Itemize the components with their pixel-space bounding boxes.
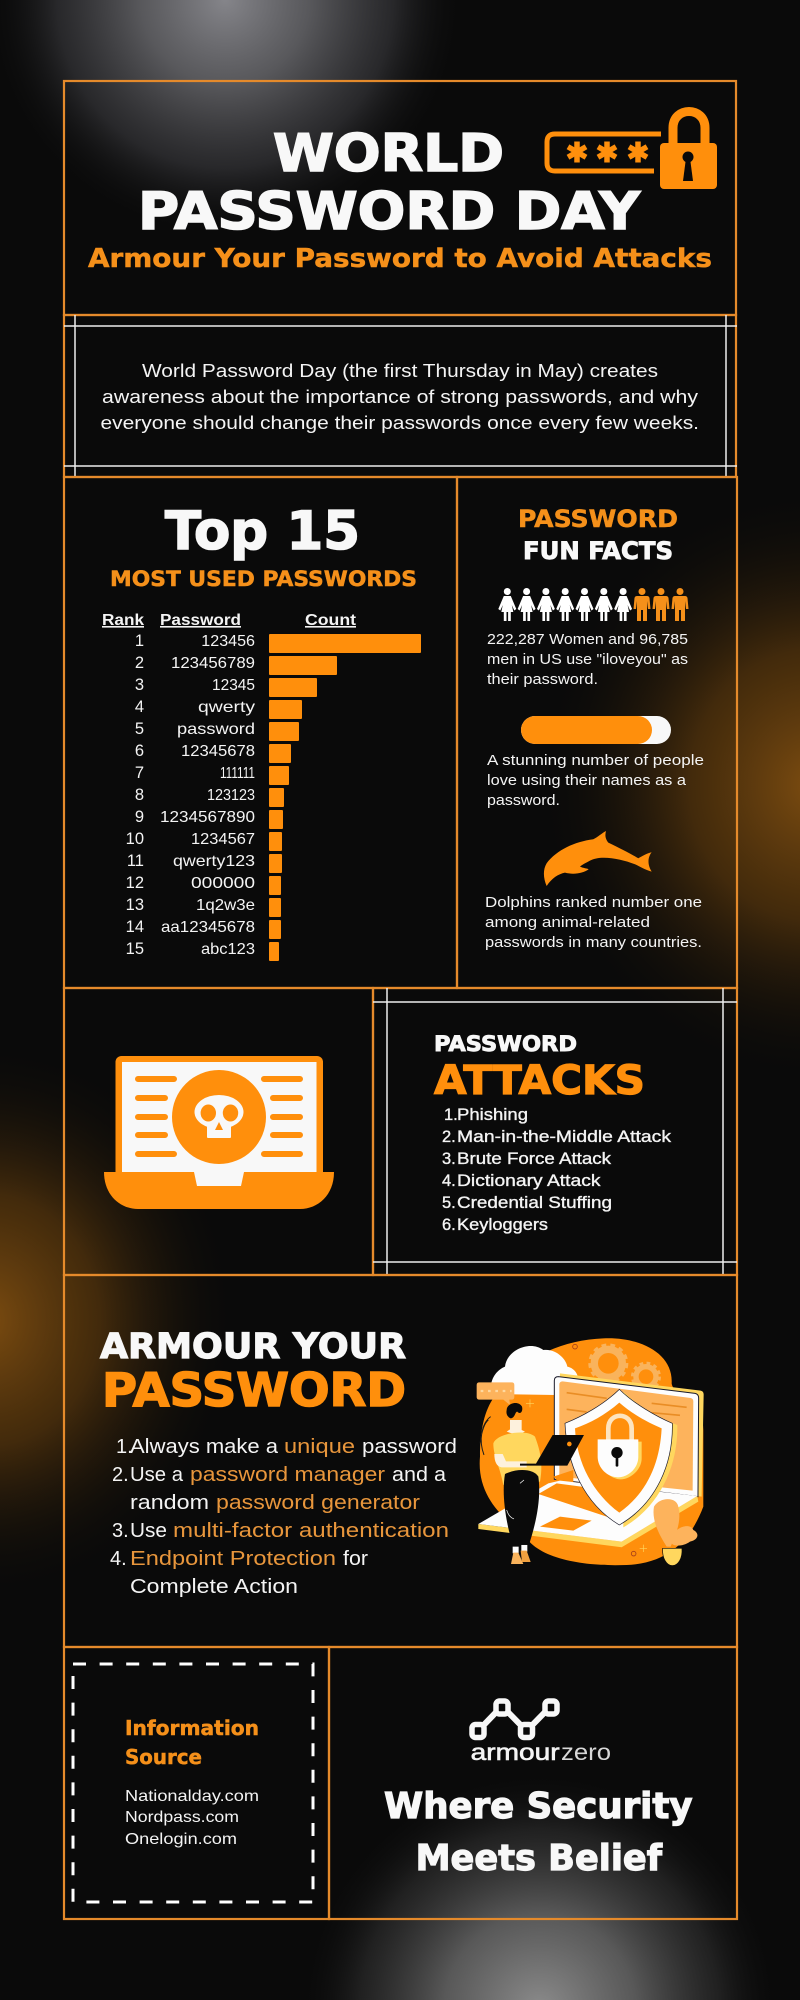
heading: password attacks [434,1032,645,1104]
tips list: unique [284,1436,355,1458]
rank column: 12 [126,874,144,892]
attacks list: 5. [442,1194,456,1212]
attacks list: Brute Force Attack [457,1150,612,1168]
dashed box [73,1664,313,1902]
heading: password attacks: PASSWORD [434,1032,577,1056]
rank column: 6 [135,742,144,760]
heading: information source: Information [125,1716,259,1740]
icon: dolphin [544,831,652,886]
tips list: 1. [116,1436,133,1458]
heading: fun facts: FUN FACTS [523,537,673,565]
table header [102,612,357,629]
icon: toggle progress bar [521,716,671,744]
fact 1 text: their password. [487,671,598,688]
rank column: 5 [135,720,144,738]
password column: 1234567890 [160,809,255,826]
rank column [126,632,144,958]
tips list: password [362,1436,457,1458]
rank column: 14 [126,918,144,936]
password column: 1q2w3e [196,897,255,914]
attacks list: 6. [442,1216,456,1234]
fact 2 text [487,752,704,809]
rank column: 11 [127,852,144,870]
password column: 12345 [212,677,255,694]
tips list: for [343,1548,368,1570]
attacks list: Man-in-the-Middle Attack [457,1128,672,1146]
tips list: password generator [216,1492,420,1514]
attacks list: Phishing [457,1106,528,1124]
rank column: 13 [126,896,144,914]
subheading: MOST USED PASSWORDS [110,567,417,591]
title [138,124,641,242]
tips list: Use [130,1520,167,1542]
fact 1 text: 222,287 Women and 96,785 [487,631,688,648]
rank column: 9 [135,808,144,826]
password column: 12345678 [181,743,255,760]
heading: armour your password [100,1327,406,1417]
fact 3 text: among animal-related [485,914,650,931]
heading: armour your password: ARMOUR YOUR [100,1327,406,1367]
logo: armourzero [471,1701,611,1765]
panel: top 15 most used passwords [64,477,457,988]
tips list: Endpoint Protection [130,1548,336,1570]
panel: laptop illustration [64,988,373,1275]
attacks list: 4. [442,1172,456,1190]
icon: password field and padlock [547,112,717,189]
panel: header [64,81,736,315]
password column: 000000 [191,875,255,892]
heading: password attacks: ATTACKS [434,1058,645,1104]
sources list [125,1788,259,1848]
heading: information source [125,1716,259,1769]
tips list: 4. [110,1548,127,1570]
table header: Rank [102,612,144,629]
panel: brand [329,1647,737,1919]
illustration: person with laptop and security shield [477,1338,704,1566]
logo: armourzero: armour [471,1739,560,1765]
intro text: World Password Day (the first Thursday in May) creates [142,360,658,381]
tips list: Always make a [130,1436,279,1458]
fact 3 text: passwords in many countries. [485,934,702,951]
tips list: 3. [112,1520,129,1542]
icon: people pictogram [498,588,688,621]
tips list: 2. [112,1464,129,1486]
password column: qwerty123 [173,853,255,870]
fact 3 text [485,894,702,951]
password column: 123456 [201,633,255,650]
sources list: Nationalday.com [125,1788,259,1805]
sources list: Nordpass.com [125,1809,239,1826]
logo: armourzero: zero [561,1739,611,1765]
password column: 123123 [207,787,255,804]
password column: password [177,721,255,738]
password column: 1234567 [191,831,255,848]
tips list: multi-factor authentication [173,1520,449,1542]
password column: 111111 [220,765,255,782]
attacks list: 1. [444,1106,458,1124]
table header: Count [305,612,357,629]
password column: abc123 [201,941,255,958]
fact 2 text: A stunning number of people [487,752,704,769]
rank column: 4 [135,698,144,716]
attacks list: Credential Stuffing [457,1194,612,1212]
subtitle: Armour Your Password to Avoid Attacks [88,244,712,274]
attacks list: Keyloggers [457,1216,548,1234]
tagline: Where Security [384,1786,692,1827]
intro text: awareness about the importance of strong passwords, and why [102,386,699,407]
password column: 123456789 [171,655,255,672]
attacks list: 2. [442,1128,456,1146]
attacks list: Dictionary Attack [457,1172,601,1190]
intro text: everyone should change their passwords once every few weeks. [100,412,699,433]
heading: fun facts [518,505,678,565]
heading: armour your password: PASSWORD [102,1363,406,1417]
fact 1 text: men in US use "iloveyou" as [487,651,688,668]
password column [160,633,255,958]
attacks list [442,1106,672,1234]
rank column: 1 [135,632,144,650]
rank column: 7 [135,764,144,782]
heading: top 15: Top 15 [165,501,360,562]
rank column: 2 [135,654,144,672]
tagline: Meets Belief [416,1838,662,1879]
attacks list: 3. [442,1150,456,1168]
tips list: random [130,1492,209,1514]
table header: Password [160,612,241,629]
fact 3 text: Dolphins ranked number one [485,894,702,911]
intro text [100,360,699,433]
tips list: and a [392,1464,447,1486]
fact 1 text [487,631,688,688]
panel: armour your password [64,1275,737,1647]
heading: information source: Source [125,1745,202,1769]
title: PASSWORD DAY [138,182,641,242]
panel: password attacks [373,988,737,1275]
sources list: Onelogin.com [125,1831,237,1848]
rank column: 15 [126,940,144,958]
rank column: 8 [135,786,144,804]
tips list: Complete Action [130,1576,298,1598]
panel: introduction [64,315,737,477]
tips list: Use a [130,1464,184,1486]
rank column: 10 [126,830,144,848]
bar chart [269,634,421,961]
fact 2 text: love using their names as a [487,772,687,789]
password column: qwerty [198,699,255,716]
password column: aa12345678 [161,919,255,936]
heading: fun facts: PASSWORD [518,505,678,533]
panel: password fun facts [457,477,737,988]
fact 2 text: password. [487,792,560,809]
rank column: 3 [135,676,144,694]
tagline [384,1786,692,1879]
title: WORLD [273,124,504,184]
icon: laptop with skull [104,1056,334,1209]
tips list: password manager [190,1464,385,1486]
panel: information source [64,1647,329,1919]
tips list [110,1436,457,1598]
